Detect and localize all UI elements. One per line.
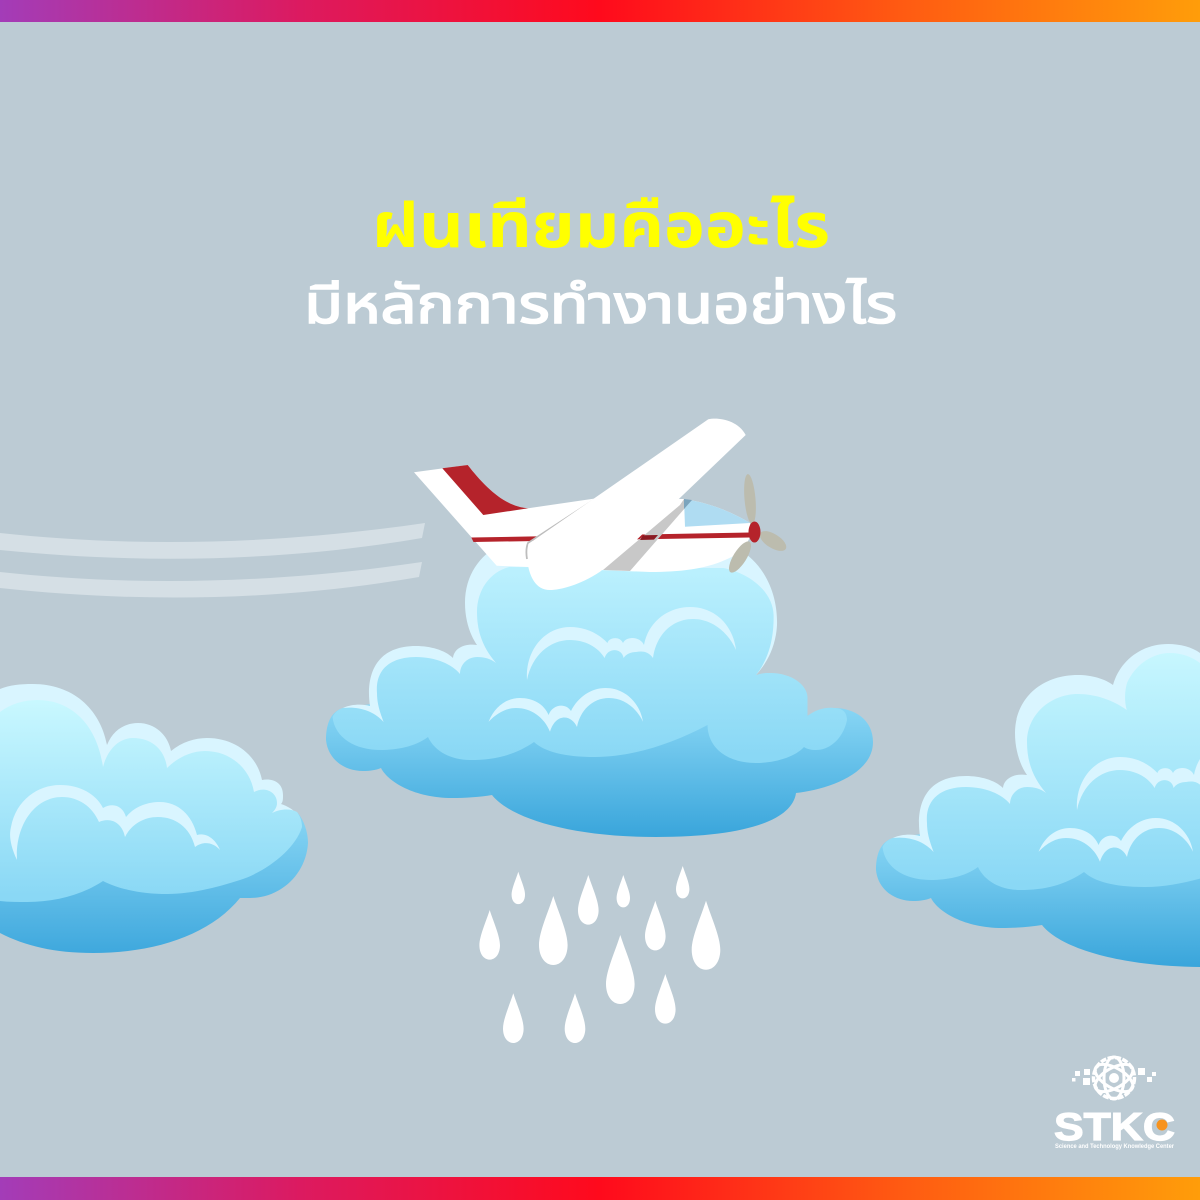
wing strut <box>603 499 692 571</box>
cloud puff upper <box>527 607 736 680</box>
fuselage <box>414 465 750 572</box>
airplane trail streaks <box>0 523 425 598</box>
logo atom icon <box>1091 1057 1137 1099</box>
airplane <box>414 419 789 590</box>
cloud puff upper <box>1077 737 1200 810</box>
wing edge line <box>526 498 597 559</box>
STKC logo <box>1054 1057 1175 1150</box>
logo orange dot <box>1156 1120 1168 1130</box>
cloud shadow base <box>0 780 308 953</box>
cloud highlight <box>343 545 777 730</box>
cloud shadow base <box>876 830 1200 967</box>
propeller <box>725 474 789 576</box>
cloud puffs <box>10 785 220 860</box>
cloud shadow base <box>326 700 873 837</box>
cloud puff lower <box>1039 818 1193 862</box>
title line 2: มีหลักการทำงานอย่างไร <box>304 275 897 335</box>
cloud body <box>0 700 302 902</box>
fuselage stripe <box>471 532 750 542</box>
propeller hub <box>748 522 760 542</box>
logo wordmark: STKC <box>1054 1106 1175 1149</box>
strut stripe crossing <box>640 535 658 540</box>
strut over window <box>684 499 692 509</box>
cloud body <box>882 630 1200 890</box>
cloud highlight <box>893 644 1200 860</box>
bottom gradient bar <box>0 1177 1200 1200</box>
raindrops <box>479 866 720 1043</box>
title <box>304 192 897 335</box>
cloud puff lower <box>489 688 643 732</box>
logo pixel squares <box>1072 1068 1156 1085</box>
cloud highlight <box>0 684 295 860</box>
cockpit window <box>684 499 750 527</box>
cloud body <box>332 567 847 763</box>
tail stripe <box>442 465 528 515</box>
logo tagline: Science and Technology Knowledge Center <box>1055 1144 1175 1150</box>
wing <box>528 419 746 590</box>
center cloud <box>326 545 873 837</box>
right cloud <box>876 630 1200 967</box>
left cloud <box>0 684 308 953</box>
top gradient bar <box>0 0 1200 22</box>
title line 1: ฝนเทียมคืออะไร <box>372 192 830 261</box>
propeller blades <box>725 474 789 576</box>
